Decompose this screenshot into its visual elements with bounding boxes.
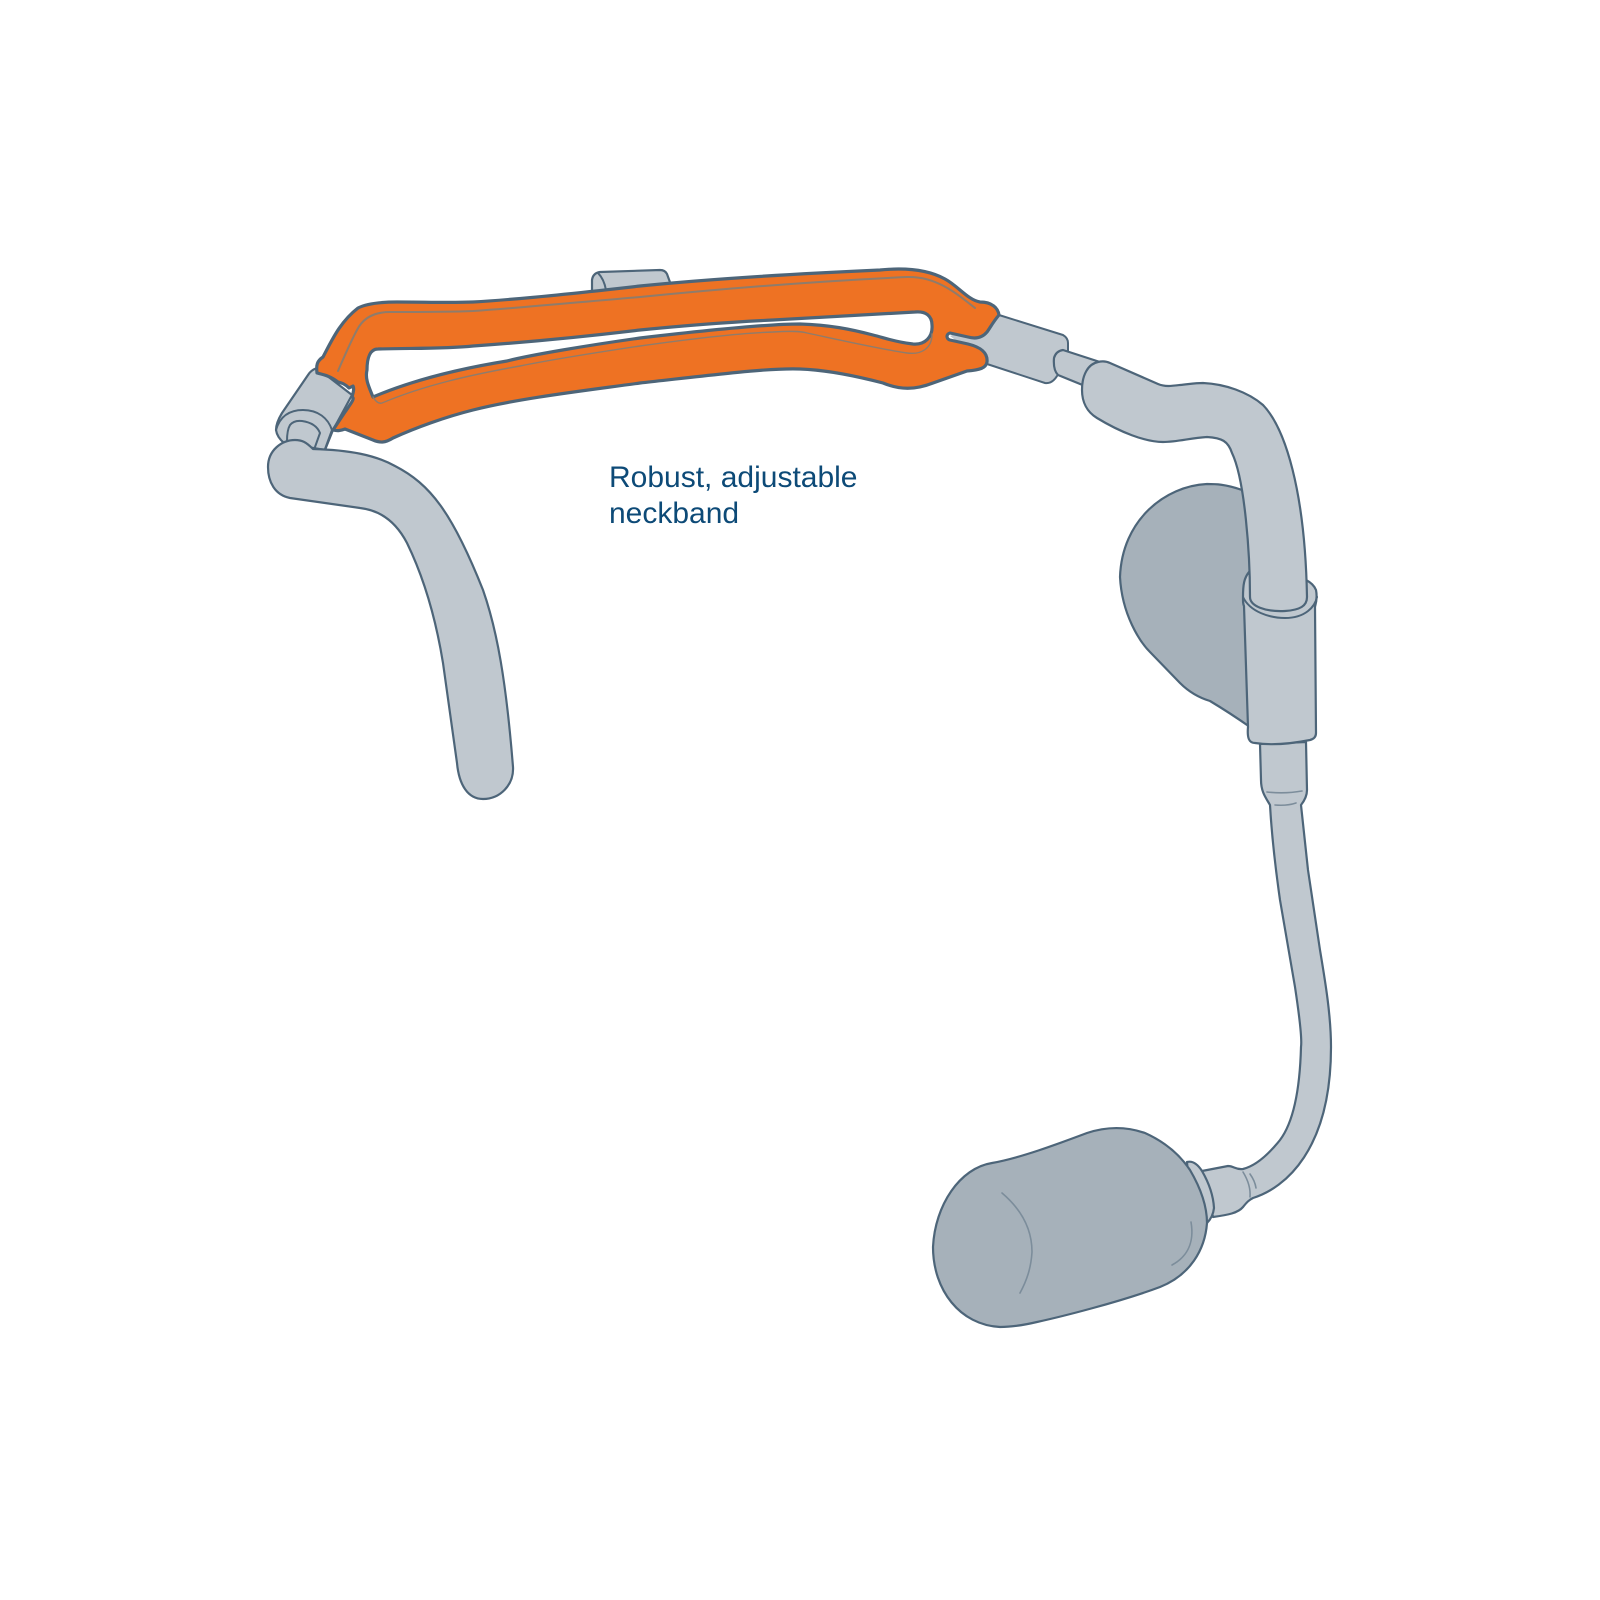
slider sleeve: [1243, 572, 1317, 744]
flexible boom tube: [1202, 742, 1331, 1217]
label: robust adjustable neckband: neckband: [609, 497, 739, 530]
left hinge barrel: [276, 368, 352, 450]
microphone collar: [1187, 1162, 1214, 1223]
label: robust adjustable neckband: Robust, adjustable: [609, 461, 858, 494]
connector outline: [987, 315, 1068, 383]
ear pad: [1120, 484, 1270, 727]
back clip behind neckband: [592, 270, 671, 292]
right connector sleeve: [950, 315, 1068, 383]
orange adjustable neckband: [317, 269, 999, 442]
connector stem: [1054, 350, 1100, 386]
microphone windscreen: [933, 1128, 1207, 1327]
left ear tube: [268, 440, 513, 799]
right ear tube: [1082, 361, 1307, 611]
